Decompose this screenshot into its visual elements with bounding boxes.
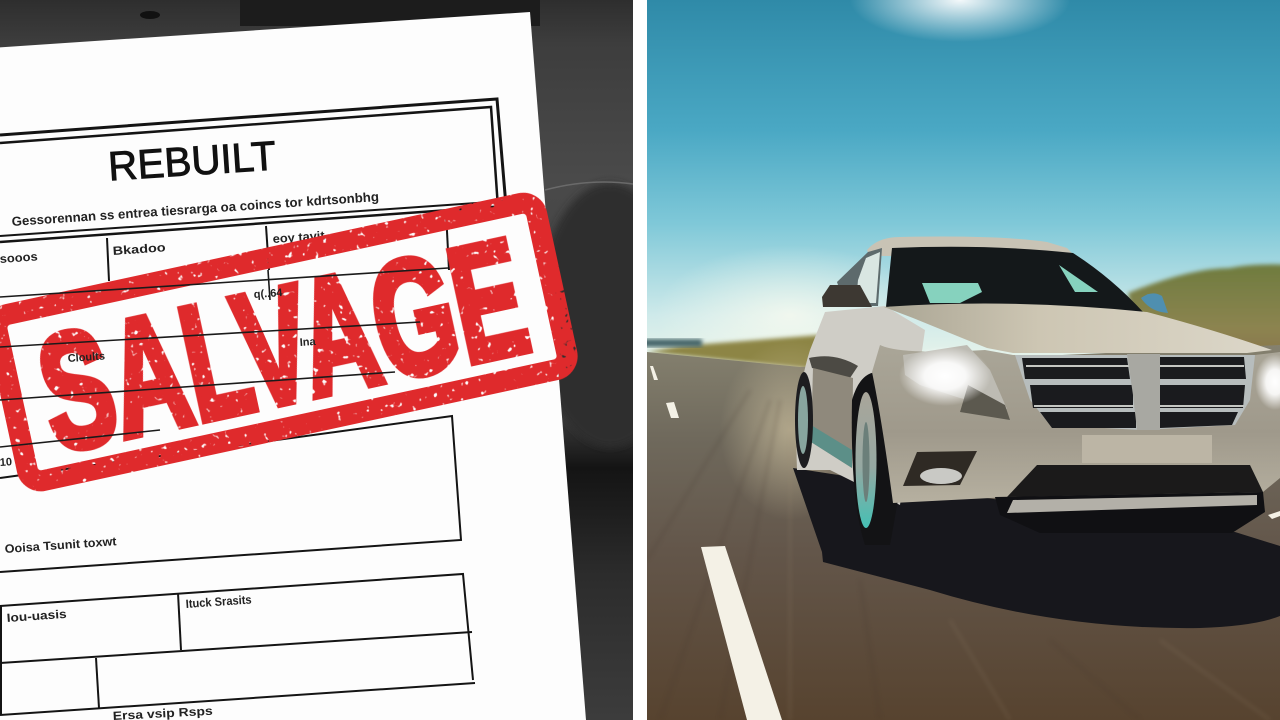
windshield bbox=[886, 247, 1144, 313]
form field labels: sooos bbox=[0, 249, 38, 266]
form field labels: Bkadoo bbox=[112, 240, 166, 258]
form fragments beneath stamp: Ina bbox=[299, 336, 317, 349]
panel: salvage title document photo bbox=[0, 0, 682, 720]
document sheet bbox=[0, 12, 586, 720]
form field labels: Ituck Srasits bbox=[185, 592, 252, 611]
road motion streaks bbox=[772, 404, 780, 444]
mirrors bbox=[822, 285, 1168, 313]
underbody bbox=[995, 492, 1265, 533]
form fragments beneath stamp: q(..64 bbox=[253, 287, 284, 301]
dark workshop background bbox=[0, 0, 682, 720]
hood bbox=[884, 303, 1272, 353]
SALVAGE stamp bbox=[0, 198, 572, 493]
form line of small text: Gessorennan ss entrea tiesrarga oa coincs tor kdrtsonbhg bbox=[11, 189, 379, 229]
door reflection band bbox=[809, 356, 858, 378]
headlight glare bbox=[901, 348, 988, 404]
front wheel bbox=[852, 372, 898, 528]
form field labels: eoy tavit bbox=[272, 228, 325, 246]
lower form boxes bbox=[0, 416, 475, 715]
grille bbox=[1015, 354, 1255, 430]
car bbox=[795, 237, 1280, 545]
sky bbox=[647, 0, 1280, 372]
door panel bbox=[811, 368, 853, 468]
form fragments beneath stamp bbox=[0, 287, 317, 469]
SALVAGE stamp: SALVAGE bbox=[24, 204, 542, 487]
hills and roadside grass bbox=[640, 264, 1280, 370]
headlight housing bbox=[903, 345, 1007, 409]
side windows bbox=[837, 248, 882, 306]
side body bbox=[797, 306, 925, 505]
road highlight near car bbox=[728, 352, 839, 510]
form lines showing through the stamp bbox=[0, 268, 448, 447]
fog lamp bbox=[903, 451, 977, 486]
form field labels: Iou-uasis bbox=[6, 607, 67, 625]
car shadow bbox=[793, 468, 1280, 628]
right headlight bbox=[1255, 354, 1280, 410]
form fragments beneath stamp: Cloults bbox=[67, 350, 105, 365]
roof bbox=[867, 237, 1075, 256]
lane markings bbox=[650, 366, 1280, 720]
form field labels: Ooisa Tsunit toxwt bbox=[4, 534, 117, 556]
number plate bbox=[1082, 435, 1212, 463]
road bbox=[647, 345, 1280, 720]
front bumper body bbox=[872, 345, 1280, 503]
rear wheel bbox=[795, 372, 813, 468]
lower intake bbox=[1007, 465, 1263, 497]
form title box bbox=[0, 99, 506, 281]
sun glare bbox=[850, 0, 1070, 42]
heading: REBUILT: REBUILT bbox=[107, 132, 277, 190]
horizon glow bbox=[685, 254, 888, 340]
form field labels bbox=[0, 228, 325, 720]
skid plate bbox=[1007, 495, 1257, 513]
panel: car driving on highway photo bbox=[640, 0, 1280, 720]
